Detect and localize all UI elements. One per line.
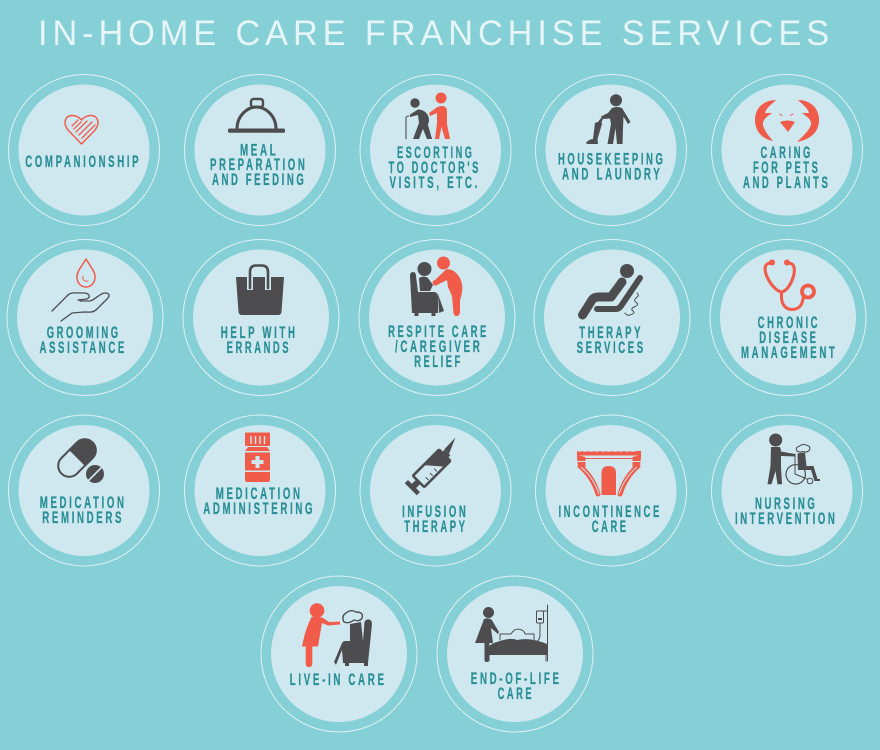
label: AND FEEDING bbox=[212, 171, 306, 189]
label: END-OF-LIFE bbox=[471, 670, 562, 688]
label bbox=[39, 324, 127, 357]
label: CARING bbox=[760, 144, 813, 162]
label bbox=[388, 144, 481, 192]
label bbox=[402, 503, 468, 536]
label: REMINDERS bbox=[42, 509, 124, 527]
label: FOR PETS bbox=[753, 159, 820, 177]
label bbox=[221, 324, 298, 357]
icon: massage chair bbox=[582, 264, 640, 315]
label: AND LAUNDRY bbox=[562, 166, 662, 184]
label: MEDICATION bbox=[216, 485, 303, 503]
icon: two walking figures bbox=[406, 92, 450, 139]
panel: grooming bbox=[7, 240, 163, 396]
label bbox=[558, 150, 665, 184]
icon: adult diaper bbox=[577, 451, 641, 495]
label: THERAPY bbox=[579, 324, 643, 342]
panel: infusion therapy bbox=[360, 415, 511, 566]
label bbox=[203, 485, 315, 518]
panel: incontinence care bbox=[536, 415, 686, 566]
label: SERVICES bbox=[577, 339, 646, 357]
icon: hands around dog face bbox=[755, 100, 819, 142]
icon: heart with hands bbox=[65, 115, 98, 144]
icon: caregiver feeding person in armchair bbox=[302, 603, 372, 667]
label: CHRONIC bbox=[758, 314, 820, 332]
label: ADMINISTERING bbox=[203, 500, 315, 518]
icon: carer at hospital bed with drip bbox=[475, 605, 548, 662]
icon: syringe bbox=[405, 435, 465, 495]
icon: hand and water drop bbox=[52, 259, 109, 321]
panel: errands bbox=[183, 240, 339, 396]
panel: live-in care bbox=[261, 576, 417, 732]
icon: stethoscope bbox=[765, 260, 814, 310]
label: CARE bbox=[498, 685, 534, 703]
label bbox=[210, 142, 307, 189]
panel: escorting bbox=[360, 74, 511, 226]
panel: end-of-life care bbox=[437, 576, 593, 732]
title: IN-HOME CARE FRANCHISE SERVICES bbox=[38, 14, 834, 53]
label: MEAL bbox=[240, 142, 278, 160]
label bbox=[471, 670, 562, 703]
panel: therapy bbox=[534, 240, 690, 396]
label: RESPITE CARE bbox=[388, 323, 489, 341]
label: /CAREGIVER bbox=[395, 338, 482, 356]
label: GROOMING bbox=[47, 324, 121, 342]
label bbox=[743, 144, 830, 192]
label bbox=[741, 314, 837, 362]
panel: meal preparation bbox=[184, 74, 336, 226]
label bbox=[388, 323, 489, 371]
label: CARE bbox=[592, 518, 629, 536]
label: DISEASE bbox=[759, 329, 818, 347]
label: COMPANIONSHIP bbox=[25, 153, 141, 171]
label: ASSISTANCE bbox=[39, 339, 127, 357]
label: HELP WITH bbox=[221, 324, 298, 342]
label: RELIEF bbox=[414, 353, 463, 371]
panel: companionship bbox=[8, 74, 160, 226]
label: ESCORTING bbox=[397, 144, 474, 162]
label: TO DOCTOR'S bbox=[388, 159, 481, 177]
panel: housekeeping bbox=[536, 74, 686, 226]
icon: caregiver and seated person bbox=[410, 256, 462, 316]
icon: shopping bag bbox=[236, 266, 284, 315]
label bbox=[577, 324, 646, 357]
label bbox=[40, 494, 127, 527]
icon: nurse and wheelchair bbox=[768, 434, 820, 484]
label: VISITS, ETC. bbox=[389, 174, 480, 192]
label: THERAPY bbox=[404, 518, 467, 536]
panel: pets and plants bbox=[712, 74, 862, 226]
panel: nursing intervention bbox=[712, 415, 862, 566]
panel: chronic disease bbox=[710, 240, 866, 396]
label bbox=[735, 495, 837, 528]
label bbox=[558, 503, 662, 536]
label: MEDICATION bbox=[40, 494, 127, 512]
panel: respite care bbox=[359, 240, 515, 396]
icon: person vacuuming bbox=[586, 94, 630, 144]
icon: pill bottle bbox=[245, 432, 270, 482]
icon: capsule and tablet bbox=[53, 433, 104, 483]
label: ERRANDS bbox=[227, 339, 291, 357]
panel: medication administering bbox=[184, 415, 336, 566]
icon: cloche bbox=[228, 99, 285, 133]
label: NURSING bbox=[755, 495, 817, 513]
label: HOUSEKEEPING bbox=[558, 150, 665, 168]
label: PREPARATION bbox=[210, 156, 307, 174]
label: LIVE-IN CARE bbox=[290, 671, 387, 689]
label: INCONTINENCE bbox=[558, 503, 662, 521]
label: INFUSION bbox=[402, 503, 468, 521]
panel: medication reminders bbox=[8, 415, 160, 566]
